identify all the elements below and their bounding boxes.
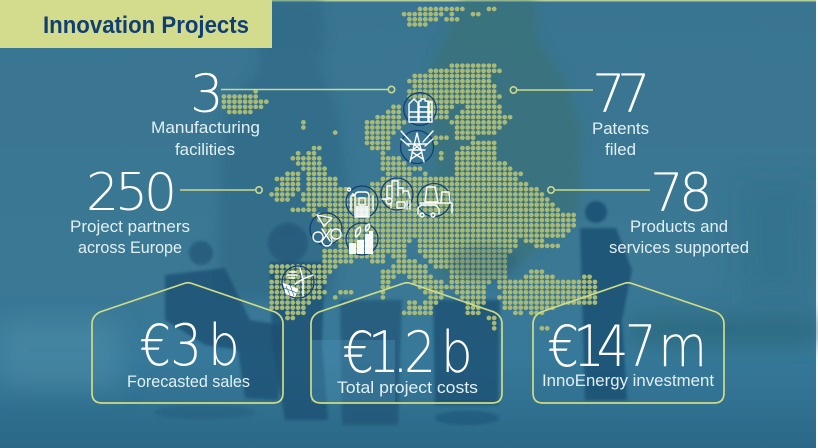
stat: products and services: Products and <box>630 218 728 236</box>
stat: products and services <box>548 163 749 257</box>
stat: manufacturing facilities: Manufacturing <box>151 119 260 137</box>
panel: innoenergy investment: €147 m <box>547 313 707 380</box>
stat: patents filed: Patents <box>592 120 649 138</box>
panel: total project costs <box>311 283 502 403</box>
panel: total project costs: Total project costs <box>337 379 478 397</box>
panel: innoenergy investment: InnoEnergy investment <box>542 372 714 390</box>
icon: smart city <box>381 178 413 210</box>
stat: project partners: across Europe <box>78 239 182 257</box>
stat: manufacturing facilities: 3 <box>190 64 224 125</box>
stat: products and services: 78 <box>650 163 713 224</box>
shading over map from silhouette <box>449 244 517 280</box>
stat: project partners <box>70 163 262 257</box>
title banner: Innovation Projects <box>43 12 249 39</box>
stat: patents filed: filed <box>605 141 636 159</box>
panel: innoenergy investment <box>533 283 724 403</box>
icon: wind turbine and solar panel <box>282 266 314 298</box>
stat: patents filed <box>510 64 651 159</box>
panel: forecasted sales: €3 b <box>139 312 240 379</box>
dotted map of Europe <box>224 9 595 328</box>
stat: project partners: Project partners <box>70 218 190 236</box>
icon: molecules and drill <box>310 213 342 246</box>
icon: batteries <box>404 93 436 125</box>
panel: forecasted sales: Forecasted sales <box>127 373 250 391</box>
stat: manufacturing facilities: facilities <box>175 141 235 159</box>
panel: total project costs: €1.2 b <box>342 319 473 386</box>
icon: plant and vehicle <box>418 184 452 217</box>
icon: fuel cell <box>346 186 378 218</box>
icon: power pylon <box>400 130 434 164</box>
panel: forecasted sales <box>92 283 283 403</box>
stat: manufacturing facilities <box>151 64 395 159</box>
stat: products and services: services supported <box>609 239 749 257</box>
title banner <box>0 0 272 48</box>
stat: project partners: 250 <box>86 163 177 223</box>
stat: patents filed: 77 <box>592 64 651 125</box>
icon: green city <box>346 223 378 255</box>
